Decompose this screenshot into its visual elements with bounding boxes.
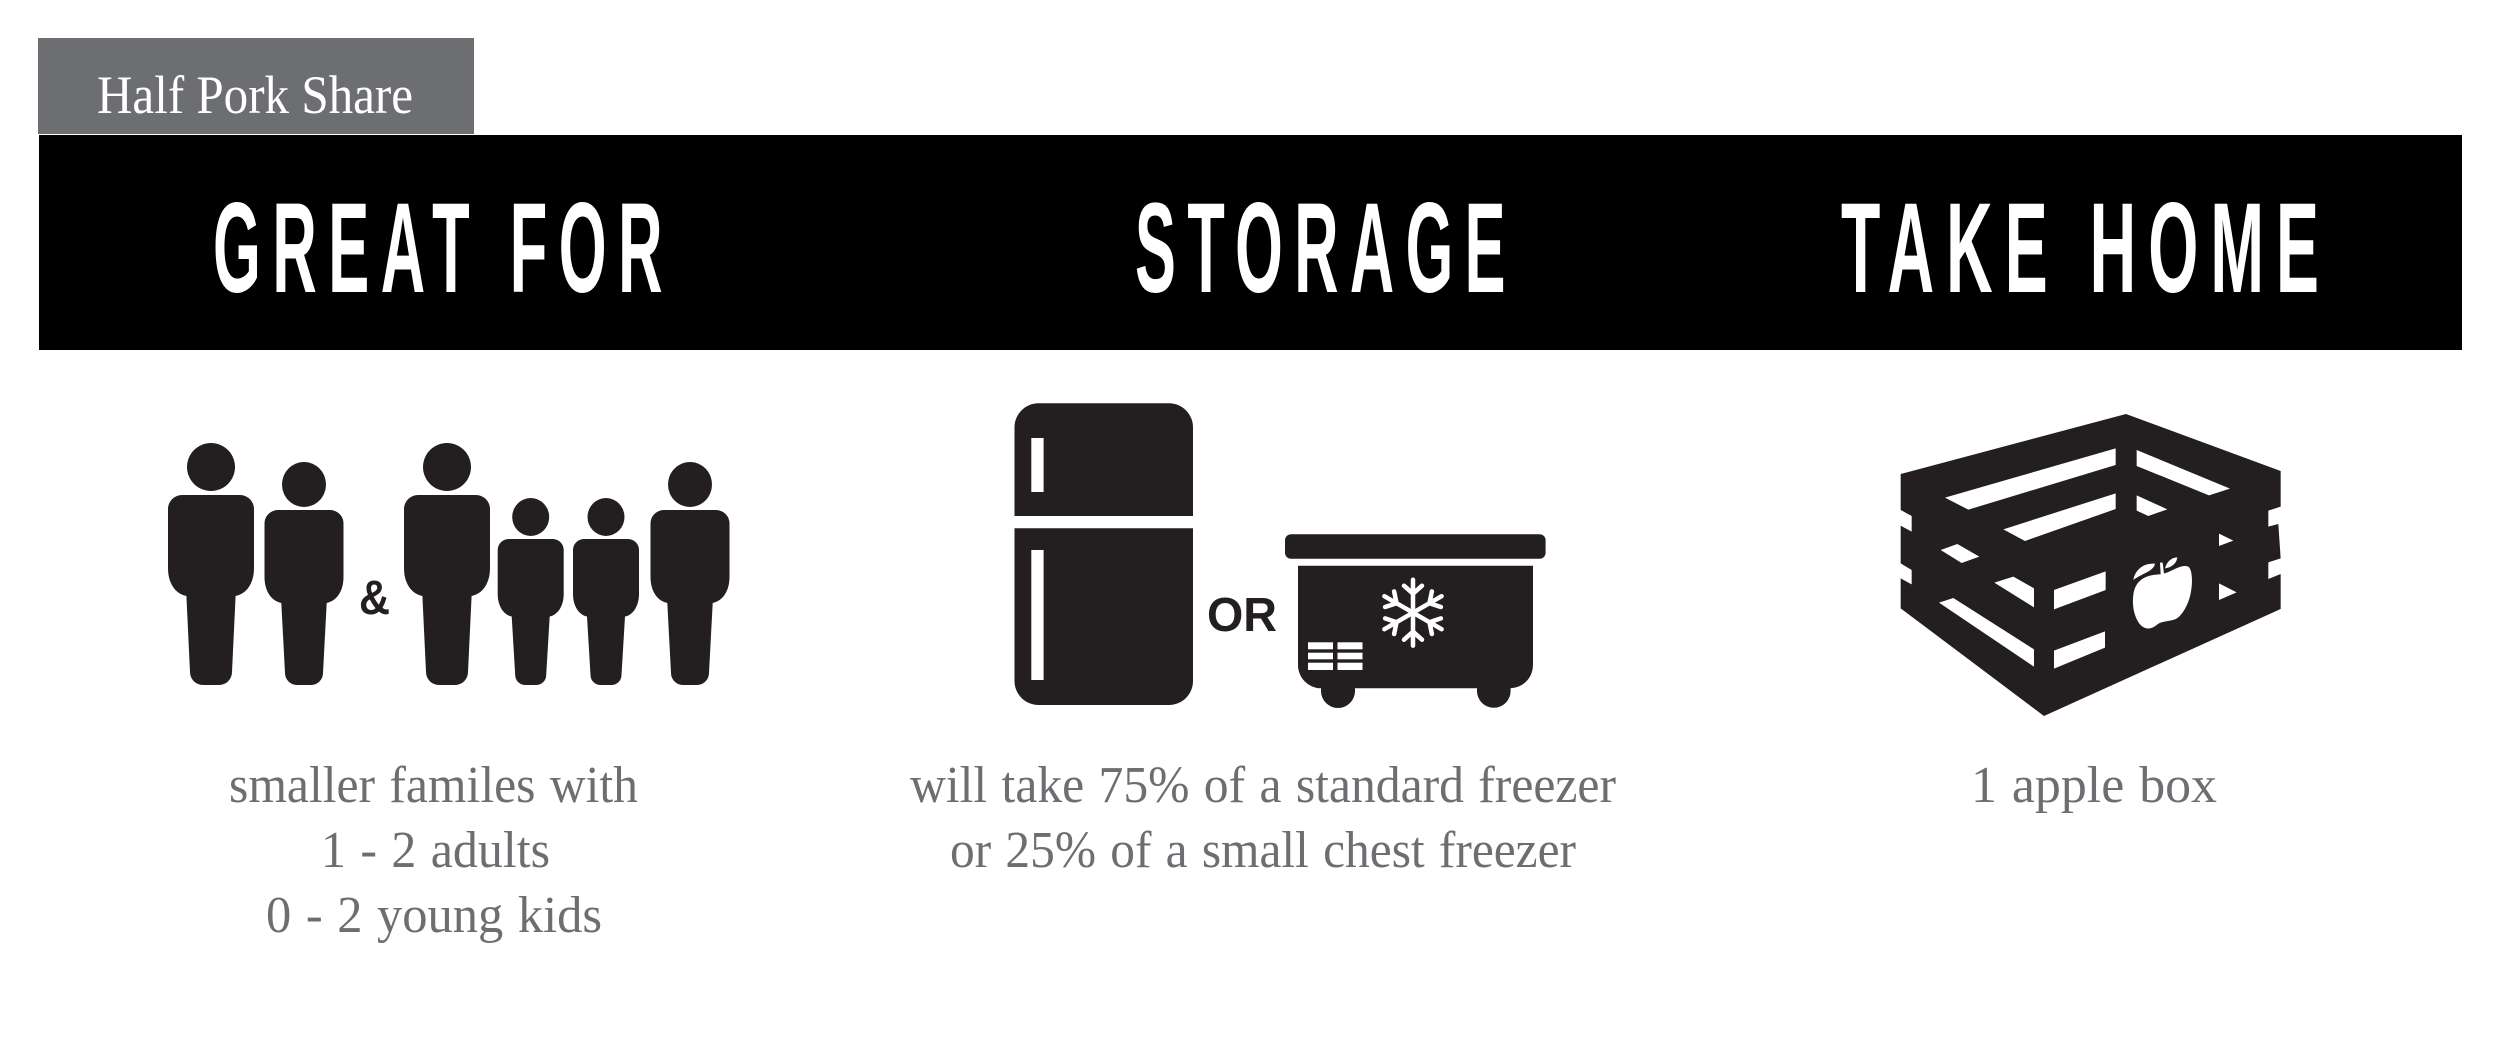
icon: family silhouettes	[168, 443, 730, 685]
vent grid	[1308, 642, 1362, 670]
tab: Half Pork Share	[38, 38, 474, 134]
text: storage description	[910, 757, 1616, 879]
icon: apple crate	[1901, 414, 2281, 716]
adult	[264, 462, 344, 685]
icon: refrigerator	[1014, 403, 1193, 705]
text: storage description: or 25% of a small chest freezer	[950, 822, 1576, 879]
text: great for description: 1 - 2 adults	[321, 822, 550, 879]
adult	[650, 462, 730, 685]
text: storage description: will take 75% of a standard freezer	[910, 757, 1616, 814]
ampersand: &	[359, 572, 390, 625]
text: take home description: 1 apple box	[1971, 757, 2217, 814]
adult	[168, 443, 254, 685]
adult	[404, 443, 490, 685]
header bar	[39, 135, 2462, 350]
apple	[2133, 566, 2192, 629]
child	[498, 498, 564, 685]
header bar: GREAT FOR	[213, 177, 674, 320]
icon: chest freezer	[1285, 534, 1546, 708]
text: great for description: 0 - 2 young kids	[266, 887, 602, 944]
text: great for description: smaller familes with	[229, 757, 638, 814]
label: OR: OR	[1207, 589, 1277, 642]
tab: Half Pork Share: Half Pork Share	[97, 65, 413, 125]
child	[573, 498, 639, 685]
header bar: STORAGE	[1135, 177, 1517, 320]
text: great for description	[229, 757, 638, 944]
snowflake	[1380, 580, 1446, 646]
